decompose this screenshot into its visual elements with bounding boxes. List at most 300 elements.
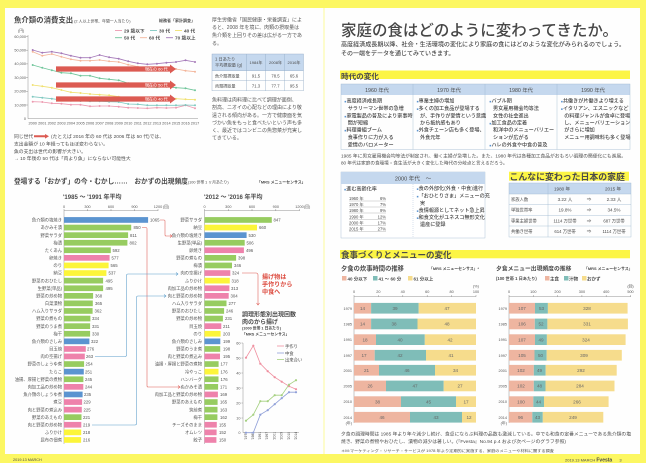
legend: 中食: [285, 350, 294, 357]
bars: 野菜サラダ: [41, 232, 63, 239]
axis: 900: [131, 205, 138, 209]
legend: age groups: 70 歳以上: [175, 35, 196, 41]
table: Japanese household change: 614 万世帯: [554, 228, 576, 235]
arrow: fish grill rank connector: [160, 220, 172, 238]
stacked bars: 266: [573, 399, 581, 404]
bars: 313: [231, 286, 239, 291]
line chart: spending by age: 50,000: [14, 48, 26, 52]
bars: 卵焼き: [49, 254, 62, 261]
bars: 魚介類のさしみ: [32, 338, 63, 345]
bars: 254: [86, 362, 93, 367]
stacked bars: 39: [392, 306, 398, 311]
section heading: change of eras: 時代の変化: [341, 71, 379, 81]
line chart: spending by age: 2007: [95, 122, 104, 126]
bars: 177: [220, 362, 228, 367]
table: fish vs meat intake: 95.5: [290, 83, 299, 88]
arrow: fried chicken rank connector: [95, 272, 178, 356]
line chart: spending by age: 2013: [153, 122, 161, 126]
bars: ふりかけ: [185, 277, 202, 284]
bars: 梅漬: [193, 262, 203, 269]
legend: age groups: 30 代: [159, 28, 171, 34]
axis: 40: [401, 290, 405, 294]
heading: side dishes today and past: 登場する「おかず」の今・むかし…… おかずの出現頻度(100 世帯 1 ヶ月あたり): [14, 176, 229, 185]
text block: generation note: 魚の支出は世代の影響が大きい。: [14, 148, 86, 155]
2000s trends: 遺産に登録: [420, 221, 445, 228]
table: fish vs meat intake: 71.3: [252, 83, 261, 88]
stacked bars: 328: [583, 306, 591, 311]
2000s trends: [417, 185, 490, 228]
column: 1960s: 食事作りに力が入る: [348, 134, 394, 141]
stacked bars: 38: [375, 399, 380, 404]
legend: 汁物: [569, 276, 578, 282]
bars: 肉と野菜の煮込み: [168, 353, 203, 360]
stacked bars: 12: [466, 415, 472, 420]
arrow: nukamiso rank connector: [142, 228, 180, 388]
table: Japanese household change: ⇒: [587, 218, 592, 224]
text block: ministry survey intro: 魚介類を上回りその差は広がる一方であ: [212, 32, 302, 39]
bars: 506: [246, 240, 254, 245]
axis: [499, 284, 634, 426]
2000s trends: ■「おひとりさま」メニューの充: [417, 192, 490, 200]
table: Japanese household change: 共働き世帯: [511, 228, 533, 235]
bars: 592: [112, 248, 120, 253]
chart title 2012-2016: '2012 〜 '2016 年平均: [204, 193, 263, 201]
bars: 850: [134, 225, 141, 230]
panel: left page: [5, 8, 323, 454]
axis: 100: [530, 290, 536, 294]
axis: [344, 284, 480, 426]
text block: generation note: (たとえば 2016 年の 60 代は 2006 年は 50 代)では、: [51, 133, 164, 140]
arrow: current 40s: [56, 94, 176, 104]
callout: fried food to ready made: [242, 273, 292, 305]
column: 1990s: の料理ジャンルが食卓に登場: [564, 112, 630, 120]
bars: 昆布の佃煮: [41, 437, 63, 444]
table: Japanese household change: ⇒: [587, 229, 592, 234]
bars: 肉の空揚げ: [181, 270, 203, 277]
bars: ハム入りサラダ: [32, 308, 63, 315]
text block: fish dishes commentary: く、最近ではコンビニの魚惣菜が充実し: [212, 127, 302, 134]
bars: 263: [86, 354, 94, 359]
axis: 2014: [499, 416, 507, 420]
column: 1970s: ■専業主婦の増加: [417, 98, 454, 104]
bars: 398: [238, 255, 246, 260]
column: 1990s: メニュー用調味料も多く登場: [564, 134, 630, 141]
column: 1980s: ■加工食品の定着: [490, 120, 527, 126]
bars: 煮豆: [53, 399, 63, 406]
stacked bars: 27: [457, 384, 463, 389]
line chart: spending by age: 2001: [38, 122, 47, 126]
bars: チーズそのまま: [172, 421, 202, 428]
bars: 221: [83, 415, 91, 420]
table: fish vs meat intake: 65.6: [290, 73, 299, 78]
bars: のり: [53, 263, 62, 269]
aging rate table: 2000 年: [349, 219, 364, 226]
bars: 野菜のしょうゆ煮: [28, 361, 63, 368]
axes: '2001: [272, 432, 276, 440]
stacked bars: 49: [537, 368, 542, 373]
2000s trends: ■食の外部化(外食・中食)進行: [417, 185, 483, 192]
bars: 331: [92, 324, 100, 329]
text block: era commentary: 80 年代は家庭の食環境・食生活が大きく変化した時代の分岐点と言えるだろう。: [341, 160, 507, 166]
axis: 2001: [499, 369, 507, 373]
stacked bars: 14: [360, 306, 365, 311]
table: Japanese household change: ⇒: [587, 208, 592, 213]
callout: fried food to ready made: 揚げ物は: [262, 273, 286, 281]
axis: (回): [627, 284, 634, 288]
axis: 1991: [499, 338, 507, 342]
table: Japanese household change: 34.5%: [607, 208, 621, 213]
line chart: spending by age: 2010: [124, 122, 132, 126]
bars: 577: [112, 255, 119, 260]
2000s trends: ■食情報源としてネット急上昇: [417, 207, 485, 214]
bars: 245: [85, 377, 93, 382]
axis: 2014: [344, 416, 352, 420]
bars: 218: [83, 430, 91, 435]
stacked bars: 44: [536, 399, 541, 404]
line chart: spending by age: 2008: [105, 122, 113, 126]
line chart: spending by age: 2006: [86, 122, 94, 126]
bars: 231: [225, 316, 233, 321]
column: 1960s: ■料理番組ブーム: [344, 126, 382, 134]
axis: 1997: [499, 354, 507, 358]
bars: ハム入りサラダ: [172, 300, 203, 307]
legend: 41 〜 60 分: [378, 276, 402, 282]
line chart: spending by age: 60,000: [14, 35, 26, 39]
aging rate table: 1990 年: [349, 213, 364, 220]
page footer: left: 2019.13 MARCH: [13, 458, 42, 462]
stacked bars: 107: [518, 306, 526, 311]
bars: 生野菜(単品): [178, 239, 203, 246]
axis: 1979: [499, 307, 507, 311]
aging rate table: 7%: [380, 202, 386, 207]
aging rate table: 6%: [380, 196, 386, 201]
panel: 2000s onward: [341, 172, 490, 238]
bars: のり: [193, 331, 202, 337]
text block: era commentary: 1985 年に男女雇用機会均等法が制定され、働く主婦が急増した。また、1980 年代は各種加工食品がおもろい調理の簡便化にも進展。: [341, 152, 626, 160]
bars: 野菜の炒め物: [176, 315, 203, 322]
bars: 納豆: [193, 224, 203, 231]
source note: MRS: 「MRS メニューセンサス」: [257, 180, 306, 184]
chart heading: 夕食の炊事時間の推移: [341, 263, 405, 272]
column: 1990s: し、メニューバリエーション: [564, 120, 630, 126]
bars: 野菜のあえもの: [32, 414, 62, 421]
axis: 2010: [499, 400, 507, 404]
bars: 216: [83, 438, 91, 443]
text block: ministry survey intro: 厚生労働省「国民健康・栄養調査」によ: [212, 16, 302, 24]
bars: 495: [106, 286, 113, 291]
table: Japanese household change: 1114 万世帯: [553, 218, 577, 224]
aging rate table: 9%: [380, 208, 386, 213]
bars: 肉の空揚げ: [41, 353, 63, 360]
column: 1990s: ■イタリアン、エスニックなど: [561, 105, 628, 112]
chart title: 調理形態別出現回数: [242, 310, 296, 318]
legend: age groups: [115, 27, 196, 42]
stacked bars: 49: [538, 337, 544, 342]
bars: 277: [228, 301, 236, 306]
legend: age groups: 50 代: [124, 36, 136, 42]
stacked bars: 47: [412, 384, 418, 389]
text block: generation note: [14, 133, 164, 162]
bars: 176: [220, 369, 228, 374]
axis: 200: [554, 290, 561, 294]
stacked bars: 50: [538, 353, 543, 358]
axis: 1991: [344, 338, 352, 342]
callout: fried food to ready made: 手作りから: [262, 280, 292, 288]
line chart: spending by age: 40,000: [14, 62, 26, 66]
2000s trends: ■和食文化がユネスコ無形文化: [417, 214, 485, 221]
table: Japanese household change: 687 万世帯: [603, 218, 625, 224]
bars: 251: [85, 369, 93, 374]
bars: 530: [248, 233, 256, 238]
axes: '2010: [287, 432, 291, 440]
column: 1980s: ■ハレの外食や中食の普及: [490, 142, 547, 148]
stacked bars: 42: [447, 337, 453, 342]
bars: あかみそ漬: [41, 224, 63, 231]
table: Japanese household change: 2015 年: [605, 186, 621, 192]
bars: 肉加工品と野菜の炒め物: [155, 391, 203, 398]
aging rate table: ■進む高齢化率: [344, 186, 377, 192]
text block: fish dishes commentary: 魚料理は肉料理に比べて調理が面倒、: [212, 96, 297, 104]
axes: 60: [236, 342, 240, 346]
line chart: spending by age: 0: [24, 117, 26, 121]
arrow: current 60s: [56, 64, 176, 74]
stacked bars: 42: [397, 353, 403, 358]
column: 1970s: ■多くの加工食品が登場する: [417, 105, 480, 112]
legend: 主食: [550, 276, 559, 282]
axes: [236, 342, 299, 440]
stacked bars: 40: [397, 337, 403, 342]
axis: (年): [501, 420, 508, 426]
table: Japanese household change: 2.33 人: [607, 197, 622, 202]
bars: 304: [230, 293, 238, 298]
bars: 肉と野菜の炒め物: [28, 421, 63, 428]
panel: fish consumption spending: [14, 16, 199, 162]
axis: 500: [627, 290, 634, 294]
bars: 362: [94, 309, 102, 314]
title: 家庭の食はどのように変わってきたか。: [341, 22, 618, 40]
stacked bars: 324: [582, 337, 590, 342]
axis: 2005: [344, 384, 352, 388]
bars: 野菜の煮もの: [176, 254, 202, 261]
text block: ministry survey intro: る。: [212, 41, 222, 47]
stacked bars: 309: [580, 353, 588, 358]
stacked bars: 14: [360, 322, 365, 327]
axes: 40: [236, 372, 240, 376]
bars: 802: [130, 240, 137, 245]
bars: 219: [83, 422, 91, 427]
line chart: spending by age: 2016: [181, 122, 190, 126]
bars: 野菜のうま煮: [36, 323, 63, 330]
aging rate table: 27%: [378, 227, 386, 232]
axis: 2010: [344, 400, 352, 404]
axis: 1200: [295, 205, 304, 209]
line: home made: [246, 346, 296, 389]
line chart: spending by age: (円): [18, 29, 25, 33]
chart heading: 夕食メニュー出現頻度の推移: [496, 264, 572, 272]
line chart: spending by age: 2015: [172, 122, 180, 126]
text block: cooking time commentary: 焼き、野菜の煮物やおひたし、漬物の減少は著しい。(『Fvesta』No.94 p.4 および次ページのグラフ参照): [341, 438, 566, 445]
column: 1980s: 1980 年代: [509, 86, 534, 94]
axis: (%): [473, 284, 480, 288]
bars: 322: [91, 339, 99, 344]
bars: 梅干: [193, 414, 203, 421]
stacked bars: 96: [518, 415, 523, 420]
axes: '1985: [251, 432, 255, 440]
bars: 165: [220, 400, 228, 405]
aging rate table: 12%: [378, 214, 386, 219]
axes: '2014: [294, 432, 298, 440]
axes: '1991: [258, 432, 262, 440]
bars: ハンバーグ: [181, 376, 203, 383]
line chart: spending by age: 2014: [162, 122, 171, 126]
aging rate table: 1980 年: [349, 207, 364, 214]
stacked bars: 102: [517, 384, 525, 389]
bars: 野菜のうま煮: [176, 346, 203, 353]
bars: 白菜漬物: [45, 300, 63, 307]
bars: 334: [92, 316, 100, 321]
bars: 324: [232, 271, 240, 276]
bars: 537: [108, 271, 116, 276]
table: Japanese household change: 1114 万世帯: [602, 228, 626, 235]
axis: 900: [273, 205, 279, 209]
axis: 2001: [344, 369, 352, 373]
axis: 400: [603, 290, 609, 294]
table: fish vs meat intake: 77.7: [271, 83, 280, 88]
axes: 20: [236, 402, 240, 406]
legend: [342, 276, 434, 282]
axis: 1200: [154, 205, 162, 209]
bars: 318: [232, 278, 239, 283]
bars: 野菜の煮もの: [36, 315, 62, 322]
aging rate table: 1960 年: [349, 195, 364, 202]
bars: 163: [220, 407, 228, 412]
bars: 660: [259, 225, 267, 230]
stacked bars: 18: [362, 337, 368, 342]
chart source: 「MRS メニューセンサス」: [242, 332, 289, 336]
bars: 811: [130, 233, 137, 238]
column: 1960s: 愛情のバロメーター: [348, 142, 394, 148]
stacked bars: 21: [364, 368, 369, 373]
line: prepared food: [246, 392, 296, 433]
bars: 冷やっこ: [185, 368, 202, 375]
stacked bars: 43: [433, 415, 439, 420]
table: Japanese household change: 単独世帯率: [511, 207, 533, 214]
stacked bars: 17: [361, 353, 367, 358]
stacked bars: 102: [517, 368, 525, 373]
axis: 100: [473, 290, 479, 294]
line chart: spending by age: 2011: [134, 122, 142, 126]
column: 1980s: [490, 86, 554, 148]
line chart: spending by age: 2009: [114, 122, 123, 126]
table: fish vs meat intake: [212, 54, 304, 91]
bars: 卵焼き: [189, 247, 202, 254]
stacked bars: 107: [518, 337, 526, 342]
table: fish vs meat intake: 魚介類摂取量: [215, 72, 240, 78]
bars: 176: [220, 377, 228, 382]
intro text: その一端をデータを通じてみていきます。: [341, 49, 454, 57]
bars: 211: [223, 324, 230, 329]
panel: page gutter: [323, 8, 325, 454]
footnote: ＊M:マーケティング・リサーチ・サービスが 1978 年より定期的に実施する、家庭のメニューや材料に関する調査: [341, 448, 555, 453]
bars: 235: [84, 392, 92, 397]
table: Japanese household change: 19.8%: [558, 208, 572, 213]
column: 1960s: ■家電製品の普及により家事時: [344, 112, 413, 120]
panel: right page: [325, 8, 640, 454]
text block: cooking time commentary: 夕食の調理時間は 1985 年より年々減少し続け、食卓にならぶ料理の品数も激減している。中でも和食の定番メニューである魚介類の塩: [341, 430, 631, 438]
stacked bars: 52: [538, 322, 544, 327]
column: 1980s: 女性の社会進出: [493, 112, 529, 120]
axis: 60: [425, 290, 429, 294]
section heading: meal preparation and menus: [340, 250, 630, 260]
axis: 1997: [344, 354, 352, 358]
bars: 肉と野菜の炒め物: [168, 292, 203, 299]
table: fish vs meat intake: 1984年: [250, 59, 262, 65]
bars: [15, 217, 160, 444]
bars: 203: [223, 331, 231, 336]
text block: fish dishes commentary: 割高、ニオイの心配などの理由により敬: [212, 104, 302, 111]
bars: 野菜の炒め物: [36, 292, 63, 299]
section heading: change of eras: [340, 70, 630, 81]
line chart: spending by age: 2017: [191, 122, 199, 126]
line chart: spending by age: 2004: [67, 122, 75, 126]
stacked bars: 17: [463, 399, 469, 404]
line chart: spending by age: 10,000: [14, 104, 26, 108]
stacked bars: 284: [576, 384, 584, 389]
column: 1960s: 間が短縮: [348, 120, 368, 126]
aging rate table: 2015 年: [349, 226, 364, 233]
legend: 40 分以下: [348, 276, 368, 282]
line chart: spending by age: 2012: [143, 122, 152, 126]
axes: '2005: [280, 432, 284, 440]
table: fish vs meat intake: 肉類摂取量: [215, 82, 235, 88]
stacked bars: 34: [453, 368, 458, 373]
bars: 368: [95, 293, 103, 298]
column: 1970s: 1970 年代: [437, 86, 462, 94]
axis: 2005: [499, 384, 507, 388]
axis: 1979: [344, 307, 352, 311]
column: 1980s: ションが広がる: [493, 134, 529, 141]
stacked bars: 331: [583, 322, 591, 327]
bars: 195: [223, 354, 231, 359]
panel: 2000s onward: 2000 年代 〜: [395, 174, 432, 182]
text block: fish dishes commentary: てきている。: [212, 135, 242, 142]
axis: [63, 204, 170, 444]
legend: おかず: [587, 276, 601, 282]
axes: 0: [238, 431, 240, 435]
line chart: spending by age: 30,000: [14, 76, 26, 80]
legend: 出来合い: [285, 356, 302, 364]
bars: 野菜のおひたし: [32, 277, 62, 284]
heading: fish spending: 魚介類の消費支出 (2 人以上世帯、年間一人当たり): [14, 16, 131, 24]
bars: 346: [234, 263, 242, 268]
line chart: spending by age: 2003: [57, 122, 66, 126]
stacked bars: 48: [537, 384, 542, 389]
text block: era commentary: [341, 152, 626, 166]
stacked bar chart: dinner menu frequency: [496, 264, 634, 426]
column: 1960s: [344, 86, 413, 148]
text block: generation note: 支出金額が 10 年経ってもほぼ変わらない。: [14, 140, 108, 148]
bars: 魚介類のさしみ: [172, 338, 203, 345]
chart subtitle: 肉のから揚げ: [242, 318, 278, 326]
legend: 手作り: [285, 343, 298, 350]
axis: 0: [353, 290, 355, 294]
legend: [545, 276, 601, 282]
axes: 30: [236, 386, 240, 390]
text block: fish dishes commentary: づかい魚をもっと食べたいという声も多: [212, 119, 302, 126]
line chart: spending by age: 2000: [28, 122, 37, 126]
stacked bars: 292: [577, 368, 585, 373]
axis: 1985: [499, 322, 507, 326]
